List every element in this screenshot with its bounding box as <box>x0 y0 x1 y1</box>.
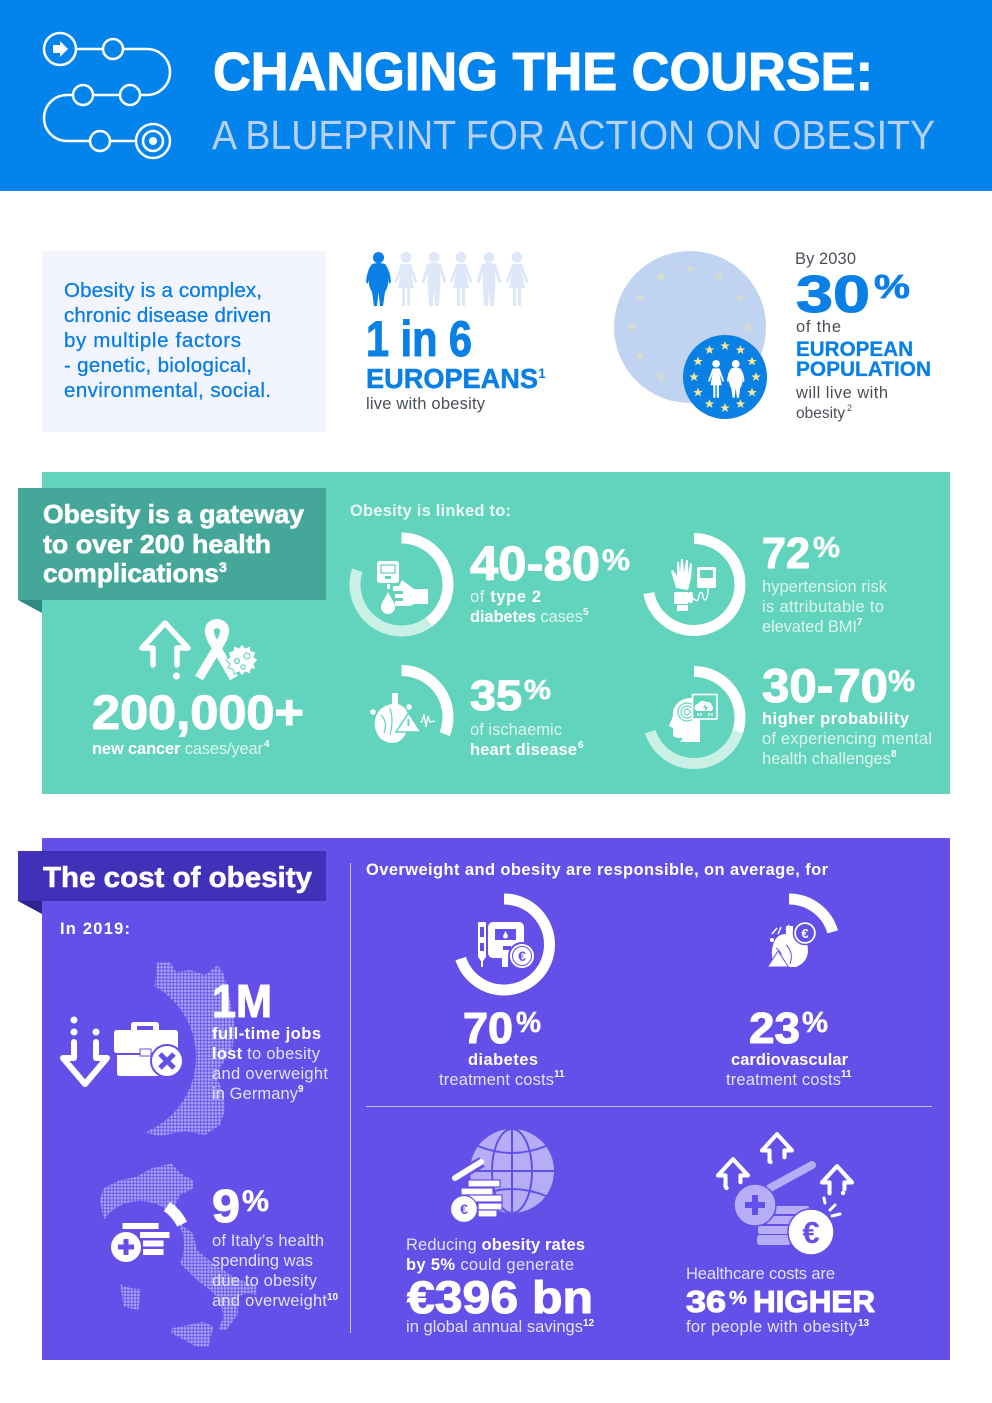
chart: ring 72 percent <box>648 538 740 630</box>
icon: row of six people <box>366 252 528 306</box>
icon: blood pressure cuff <box>671 559 716 611</box>
stat: 30% by 2030: 2 <box>847 403 852 413</box>
panel: obesity definition: environmental, social. <box>64 379 271 402</box>
stat: 30% by 2030: EUROPEAN <box>796 338 913 361</box>
stat: Germany jobs: 1M <box>212 975 272 1027</box>
stat: higher healthcare costs: 36 <box>686 1284 726 1319</box>
item: mental health: 30-70 <box>762 659 888 712</box>
stat: cardiovascular costs: 11 <box>841 1069 852 1080</box>
icon: medical coins <box>111 1223 170 1262</box>
item: mental health: health challenges <box>762 750 891 768</box>
subtitle: A BLUEPRINT FOR ACTION ON OBESITY <box>212 112 935 158</box>
stat: higher healthcare costs <box>686 1134 875 1336</box>
stat: 1 in 6 Europeans <box>366 252 546 413</box>
stat: 30% by 2030: will live with <box>795 384 888 402</box>
item: hypertension <box>648 529 888 636</box>
stat: Italy health spending <box>75 1163 339 1347</box>
stat: higher healthcare costs: € <box>802 1215 820 1250</box>
stat: diabetes costs <box>439 899 565 1089</box>
stat: global savings: in global annual savings <box>406 1318 583 1336</box>
item: mental health: % <box>888 665 915 698</box>
heading ribbon: The cost of obesity <box>43 862 312 894</box>
stat: diabetes costs: diabetes <box>468 1051 538 1069</box>
stat: 1 in 6 Europeans: EUROPEANS <box>366 363 538 394</box>
item: type 2 diabetes: 5 <box>583 607 589 618</box>
label: overweight and obesity: Overweight and obesity are responsible, on average, for <box>366 861 829 879</box>
stat: Germany jobs: full-time jobs <box>212 1025 321 1043</box>
icon: globe and coins <box>450 1129 554 1222</box>
item: hypertension: 7 <box>857 617 863 628</box>
icon: head with storm cloud <box>669 694 717 742</box>
stat: higher healthcare costs: for people with obesity <box>686 1318 858 1336</box>
panel: cost of obesity <box>18 838 950 1360</box>
panel: obesity definition <box>42 251 326 432</box>
stat: Italy health spending: of Italy’s health <box>212 1232 324 1250</box>
stat: 200,000+: new cancer cases/year <box>92 740 264 758</box>
map: Italy dots <box>100 1163 257 1347</box>
stat: cardiovascular costs: cardiovascular <box>731 1051 849 1069</box>
icon: glucose meter and hand <box>377 561 428 614</box>
stat: cardiovascular costs: % <box>802 1007 828 1039</box>
stat: 1 in 6 Europeans: live with obesity <box>366 395 486 413</box>
stat: Germany jobs: lost to obesity <box>212 1045 321 1063</box>
heading ribbon: to over 200 health <box>43 529 271 559</box>
stat: diabetes costs: % <box>516 1007 541 1039</box>
stat: global savings: by 5% could generate <box>406 1256 574 1274</box>
panel: obesity definition: chronic disease driven <box>64 304 271 327</box>
icon: rising arrow and cancer ribbon <box>142 623 258 680</box>
stat: 30% by 2030: of the <box>796 318 841 336</box>
stat: Italy health spending: % <box>242 1185 269 1218</box>
item: type 2 diabetes: % <box>602 544 630 577</box>
stat: higher healthcare costs: Healthcare costs are <box>686 1265 835 1283</box>
chart: ring 30-70 percent <box>648 672 740 764</box>
stat: diabetes costs: € <box>518 948 526 964</box>
stat: cardiovascular costs: treatment costs <box>726 1071 841 1089</box>
stat: higher healthcare costs: % <box>729 1288 747 1308</box>
item: hypertension: is attributable to <box>762 598 884 616</box>
chart: ring 23 percent <box>744 899 834 990</box>
stat: 30% by 2030: 30 <box>796 266 870 324</box>
icon: rising costs <box>718 1134 852 1255</box>
icon: route with milestones <box>44 33 170 158</box>
item: mental health <box>648 659 932 768</box>
icon: heart with euro <box>768 922 816 967</box>
item: type 2 diabetes: of type 2 <box>470 588 541 606</box>
chart: ring 70 percent <box>458 899 550 990</box>
chart: ring 9 percent <box>75 1180 205 1310</box>
stat: 200,000+: 200,000+ <box>92 687 304 740</box>
stat: Germany jobs: 9 <box>298 1084 304 1095</box>
item: heart disease: of ischaemic <box>470 721 562 739</box>
header banner <box>0 0 992 191</box>
stat: 30% by 2030: POPULATION <box>796 358 931 381</box>
stat: 1 in 6 Europeans: 1 in 6 <box>366 311 472 367</box>
stat: 200,000+: 4 <box>264 739 270 750</box>
icon: insulin pen and meter <box>478 922 535 969</box>
map: Germany dots <box>130 962 235 1136</box>
stat: Italy health spending: 10 <box>327 1292 339 1303</box>
label: obesity is linked to: Obesity is linked to: <box>350 502 511 520</box>
item: heart disease: heart disease <box>470 741 577 759</box>
stat: Germany jobs <box>60 962 328 1136</box>
item: hypertension: % <box>813 532 840 564</box>
item: type 2 diabetes <box>355 538 630 631</box>
panel: obesity definition: - genetic, biological, <box>64 354 252 377</box>
label: in 2019: In 2019: <box>60 920 130 938</box>
item: heart disease: % <box>524 674 551 705</box>
stat: 30% by 2030: By 2030 <box>795 250 856 268</box>
item: mental health: 8 <box>891 749 897 760</box>
stat: global savings: Reducing obesity rates <box>406 1236 585 1254</box>
stat: 30% by 2030: obesity <box>796 405 845 422</box>
stat: Italy health spending: and overweight <box>212 1292 327 1310</box>
stat: Germany jobs: and overweight <box>212 1065 328 1083</box>
panel: obesity definition: by multiple factors <box>64 329 241 352</box>
stat: global savings: 12 <box>583 1318 595 1329</box>
item: mental health: higher probability <box>762 710 910 728</box>
stat: Italy health spending: due to obesity <box>212 1272 318 1290</box>
item: mental health: of experiencing mental <box>762 730 932 748</box>
heading ribbon: complications <box>43 558 219 588</box>
item: hypertension: elevated BMI <box>762 618 857 636</box>
panel: health complications <box>18 472 950 794</box>
chart: ring 35 percent <box>355 670 448 764</box>
panel: obesity definition: Obesity is a complex, <box>64 279 262 302</box>
stat: 30% by 2030 <box>795 250 931 422</box>
title: CHANGING THE COURSE: <box>213 42 873 102</box>
item: hypertension: hypertension risk <box>762 578 888 596</box>
chart: ring 40-80 percent <box>355 538 448 631</box>
heading ribbon <box>18 851 326 914</box>
stat: diabetes costs: treatment costs <box>439 1071 554 1089</box>
stat: diabetes costs: 70 <box>463 1004 513 1053</box>
stat: 1 in 6 Europeans: 1 <box>538 365 546 381</box>
stat: global savings: €396 bn <box>407 1272 593 1323</box>
stat: higher healthcare costs: HIGHER <box>753 1284 875 1319</box>
heading ribbon: Obesity is a gateway <box>43 499 305 529</box>
item: heart disease: 35 <box>470 672 522 720</box>
item: heart disease <box>355 670 584 764</box>
stat: diabetes costs: 11 <box>554 1069 565 1080</box>
stat: Germany jobs: in Germany <box>212 1085 299 1103</box>
item: heart disease: 6 <box>578 740 584 751</box>
stat: cardiovascular costs: 23 <box>749 1004 800 1053</box>
item: type 2 diabetes: 40-80 <box>470 538 600 591</box>
stat: cardiovascular costs <box>726 899 852 1089</box>
item: hypertension: 72 <box>762 529 810 578</box>
icon: globe and coins: € <box>460 1201 468 1217</box>
icon: heart with warning <box>370 693 435 743</box>
stat: global savings <box>406 1129 595 1336</box>
heading ribbon: 3 <box>219 559 227 575</box>
stat: cardiovascular costs: € <box>801 926 809 941</box>
stat: 30% by 2030: % <box>874 268 910 305</box>
stat: higher healthcare costs: 13 <box>858 1318 870 1329</box>
icon: EU circle with stars <box>614 251 767 419</box>
heading ribbon <box>18 488 326 613</box>
icon: down arrow and briefcase <box>63 1016 183 1084</box>
item: type 2 diabetes: diabetes cases <box>470 608 583 626</box>
stat: Italy health spending: spending was <box>212 1252 313 1270</box>
stat: Italy health spending: 9 <box>212 1180 240 1232</box>
